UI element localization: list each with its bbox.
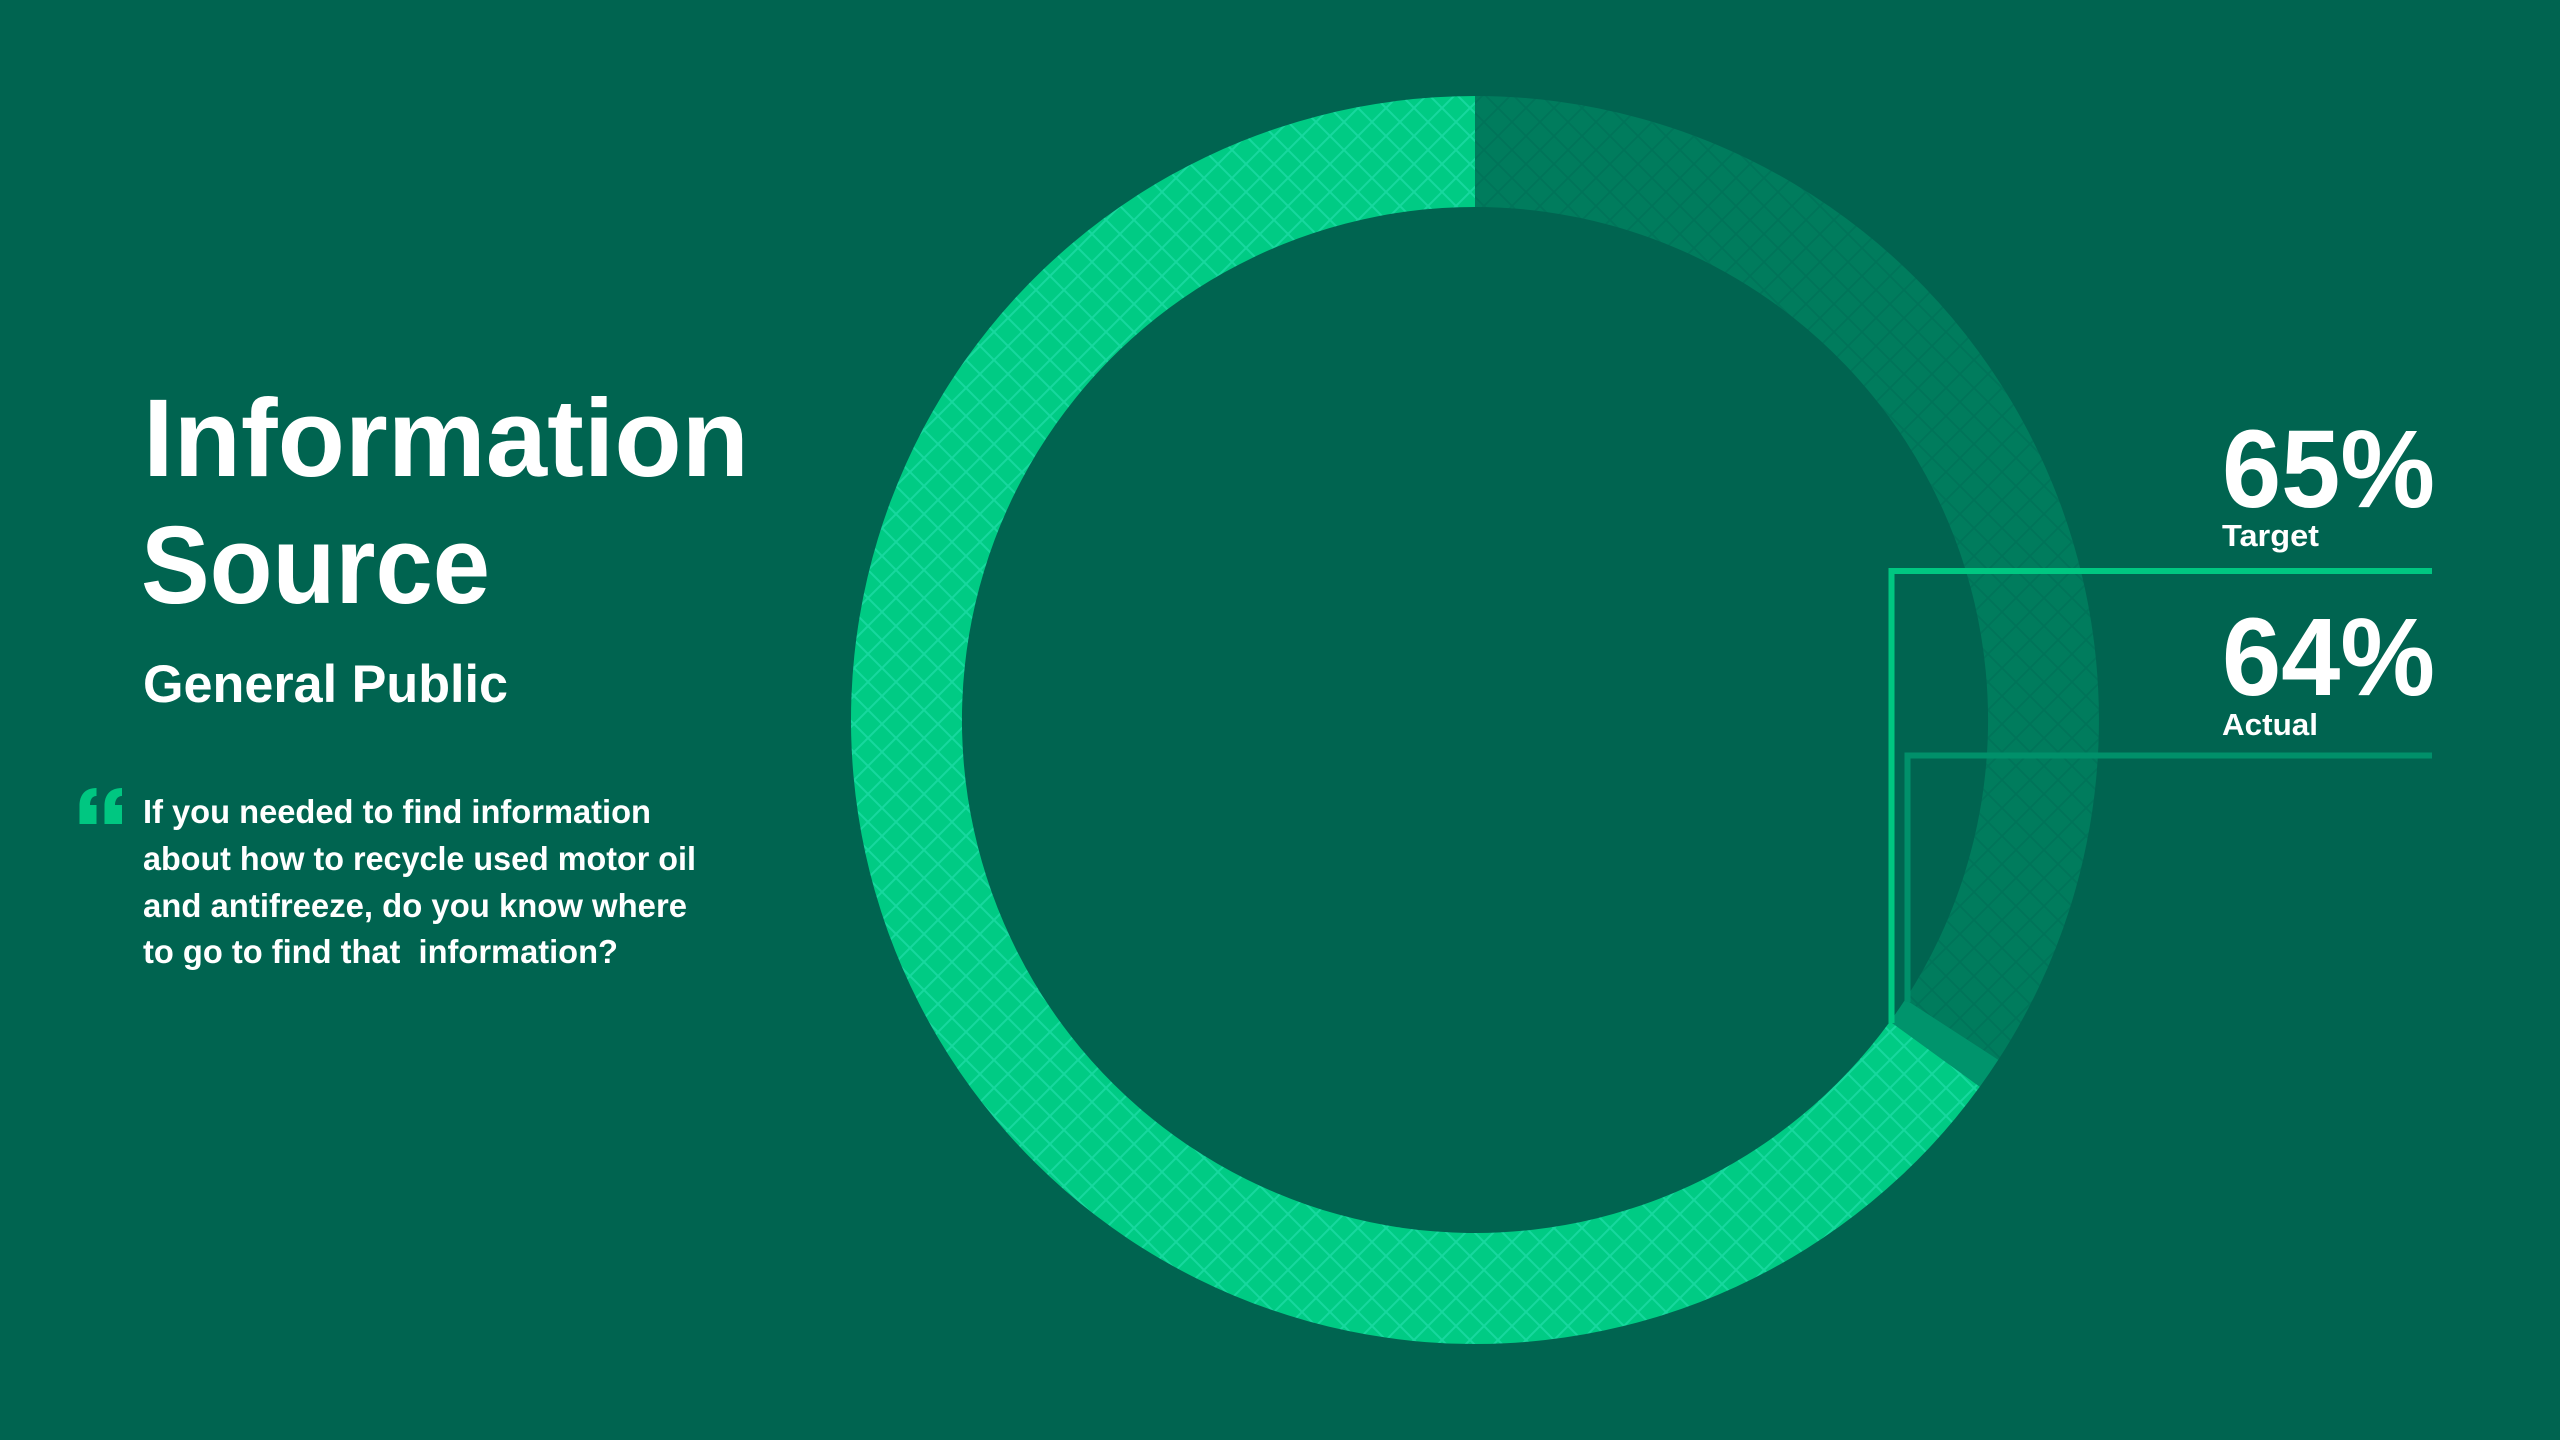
survey question (143, 793, 696, 970)
stat: actual: Actual (2222, 707, 2318, 742)
ring segment: gap between actual and target (1890, 999, 1998, 1087)
survey question: and antifreeze, do you know where (143, 887, 687, 924)
title: Information (143, 377, 749, 500)
survey question: to go to find that information? (143, 933, 618, 970)
ring segment: filled share (851, 96, 1980, 1344)
stat: actual: 64% (2222, 596, 2435, 719)
leader line: target (1892, 571, 2432, 1023)
stat: target: 65% (2222, 408, 2435, 531)
survey question: about how to recycle used motor oil (143, 840, 696, 877)
title (141, 377, 749, 627)
survey question: If you needed to find information (143, 793, 651, 830)
ring segment: remaining share (1475, 96, 2099, 1060)
stat: target: Target (2222, 518, 2319, 553)
donut chart (851, 96, 2099, 1344)
subtitle: General Public (143, 655, 508, 714)
icon: quotation mark (80, 788, 122, 824)
leader line: actual (1908, 756, 2432, 1002)
title: Source (141, 504, 490, 627)
